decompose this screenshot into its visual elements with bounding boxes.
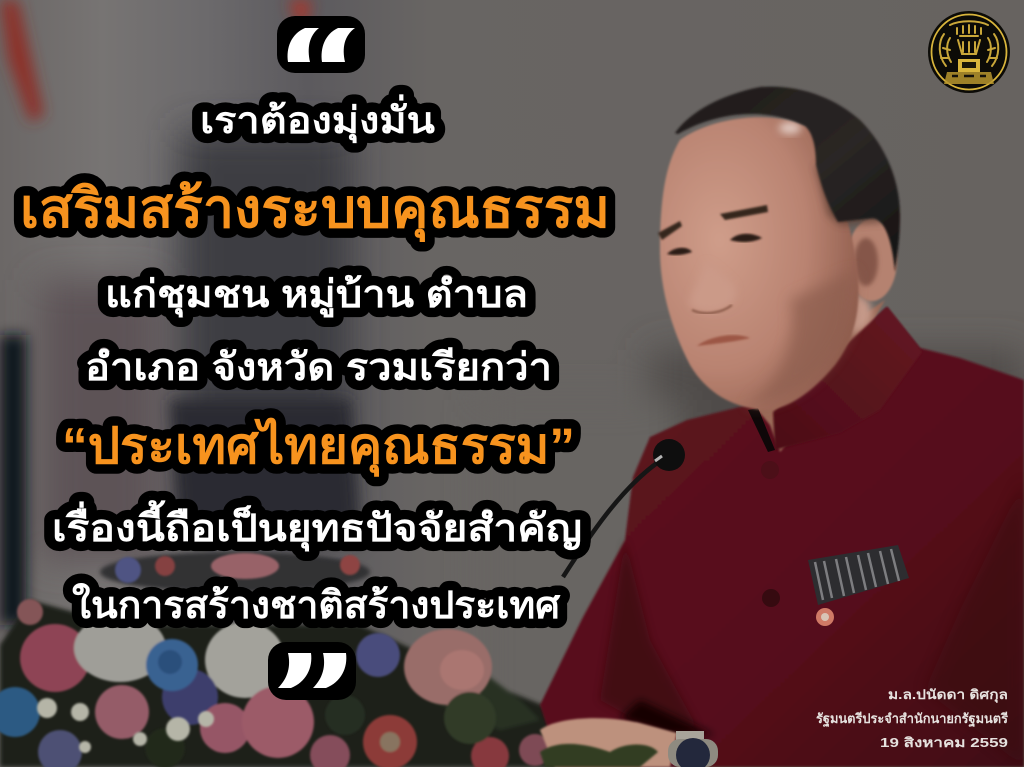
line 7: ในการสร้างชาติสร้างประเทศ — [72, 583, 561, 627]
forehead highlight — [779, 122, 801, 134]
seal filigree — [940, 21, 998, 66]
nose — [690, 262, 736, 312]
wristwatch — [668, 731, 718, 767]
arm shadow — [600, 540, 697, 727]
neck — [745, 300, 885, 452]
quote text — [20, 94, 610, 627]
pocket square — [808, 545, 909, 605]
large blooms — [0, 553, 551, 767]
collar opening — [748, 408, 775, 452]
small white blossoms — [37, 698, 214, 753]
foliage backdrop — [0, 552, 578, 767]
leaves over hand — [540, 744, 658, 767]
eyebrows — [658, 221, 682, 240]
speaker name: ม.ล.ปนัดดา ดิศกุล — [888, 687, 1008, 703]
line 6: เรื่องนี้ถือเป็นยุทธปัจจัยสำคัญ — [52, 500, 582, 552]
portrait: man in maroon jacket — [540, 87, 1024, 767]
flower bouquet — [0, 552, 578, 767]
line 1: เราต้องมุ่งมั่น — [200, 94, 435, 144]
eyes — [667, 248, 692, 255]
highlighted line 2: เสริมสร้างระบบคุณธรรม — [20, 179, 610, 243]
face — [660, 117, 858, 410]
hand — [540, 718, 677, 767]
collar — [773, 307, 922, 450]
microphone — [563, 439, 685, 577]
highlighted line 5: “ประเทศไทยคุณธรรม” — [62, 417, 575, 477]
line 3: แก่ชุมชน หมู่บ้าน ตำบล — [105, 274, 528, 318]
hair — [675, 87, 900, 272]
jacket buttons — [761, 461, 779, 479]
lapel pin — [816, 608, 834, 626]
speaker role: รัฐมนตรีประจำสำนักนายกรัฐมนตรี — [816, 711, 1008, 728]
government seal logo — [928, 11, 1010, 93]
jacket — [540, 307, 1024, 767]
attribution — [816, 687, 1008, 750]
mouth — [697, 335, 750, 346]
jaw shadow — [745, 270, 856, 405]
ear — [847, 219, 897, 301]
opening quote mark — [277, 16, 365, 73]
closing quote mark — [268, 642, 356, 700]
side fade hair — [815, 165, 885, 225]
date: 19 สิงหาคม 2559 — [880, 735, 1008, 750]
line 4: อำเภอ จังหวัด รวมเรียกว่า — [85, 347, 552, 389]
